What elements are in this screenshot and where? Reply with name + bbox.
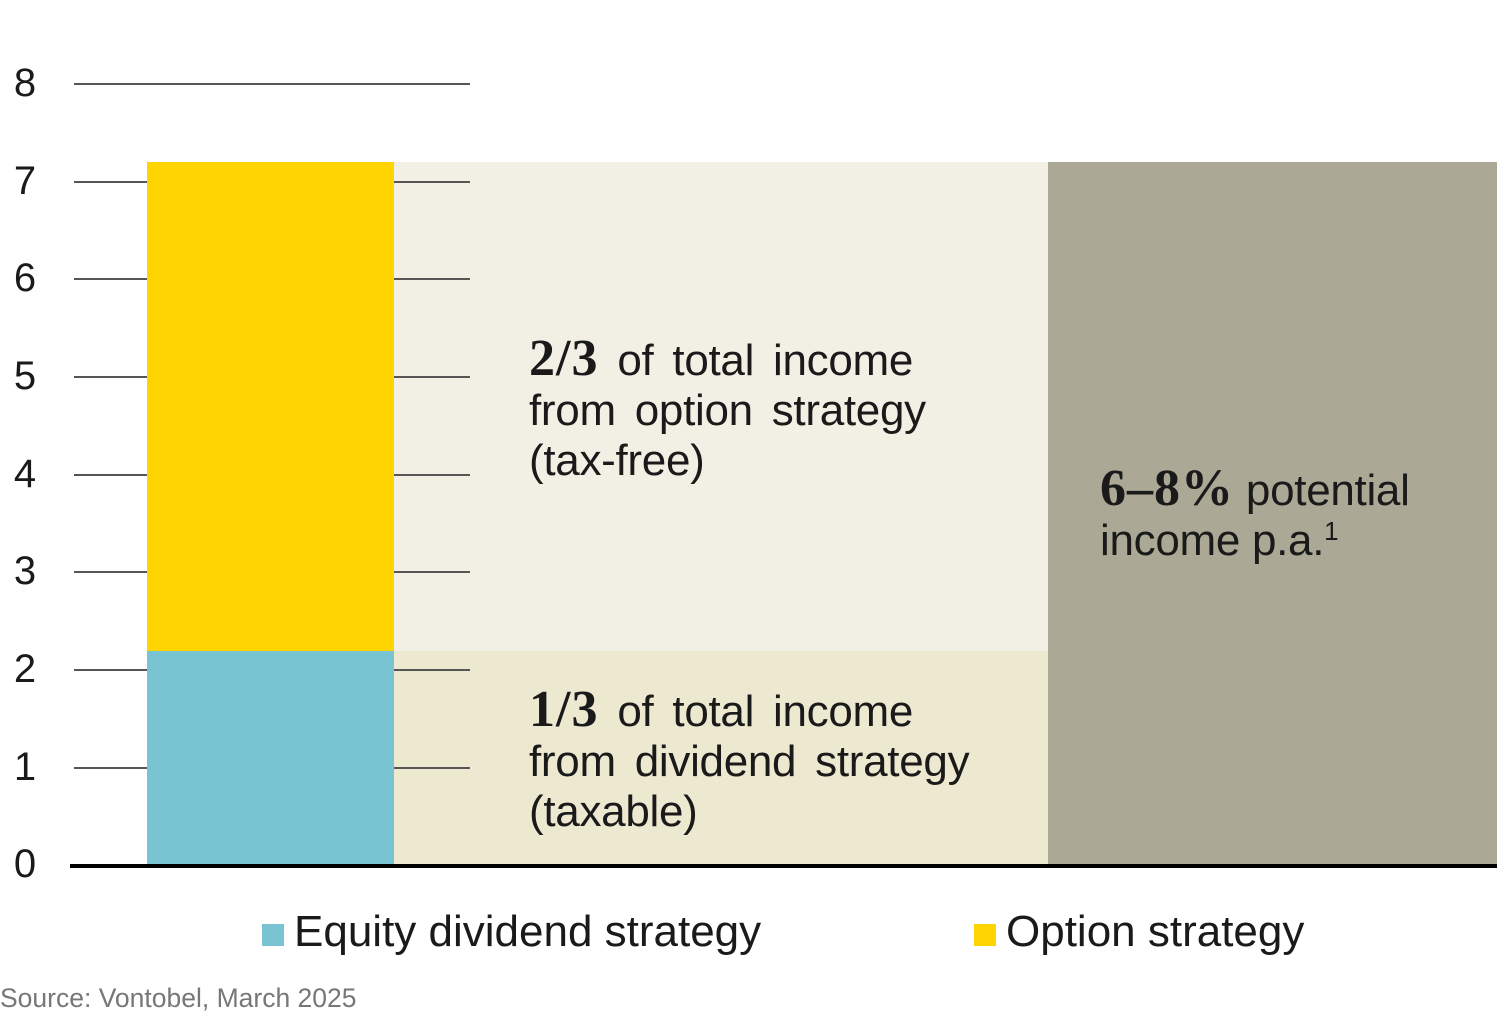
- text: 2/3 option: 2/3 of total income: [529, 330, 913, 387]
- y axis labels: 2: [14, 647, 36, 691]
- text: 2/3 option: from option strategy: [529, 386, 926, 435]
- y axis labels: 3: [14, 549, 36, 593]
- legend item: equity: Equity dividend strategy: [294, 907, 761, 956]
- y axis labels: 0: [14, 842, 36, 886]
- y axis labels: 4: [14, 452, 36, 496]
- bar segment: equity dividend: [147, 651, 394, 865]
- text: 2/3 option: (tax-free): [529, 436, 704, 485]
- y axis labels: 1: [14, 745, 36, 789]
- y axis labels: 7: [14, 159, 36, 203]
- panel: grey total area: [1048, 162, 1497, 865]
- stacked bar: [147, 162, 394, 864]
- baseline axis: [70, 864, 1497, 868]
- y axis labels: 8: [14, 61, 36, 105]
- panel: cream option area: [394, 162, 1048, 651]
- y axis labels: 6: [14, 256, 36, 300]
- text: 6-8% potential: [1100, 460, 1410, 565]
- text: 2/3 option: [529, 330, 926, 485]
- source: Source: Vontobel, March 2025: [0, 983, 357, 1013]
- legend: [262, 907, 1304, 956]
- text: 1/3 dividend: 1/3 of total income: [529, 681, 913, 738]
- text: 1/3 dividend: [529, 681, 970, 836]
- y axis labels: 5: [14, 354, 36, 398]
- legend item: option: Option strategy: [1006, 907, 1304, 956]
- y axis labels: [14, 61, 36, 886]
- text: 1/3 dividend: from dividend strategy: [529, 737, 969, 786]
- text: 6-8% potential: 6–8% potential: [1100, 460, 1410, 517]
- panel: cream dividend area: [394, 651, 1048, 865]
- bar segment: option strategy: [147, 162, 394, 651]
- text: 6-8% potential: income p.a.1: [1100, 516, 1338, 565]
- text: 1/3 dividend: (taxable): [529, 787, 698, 836]
